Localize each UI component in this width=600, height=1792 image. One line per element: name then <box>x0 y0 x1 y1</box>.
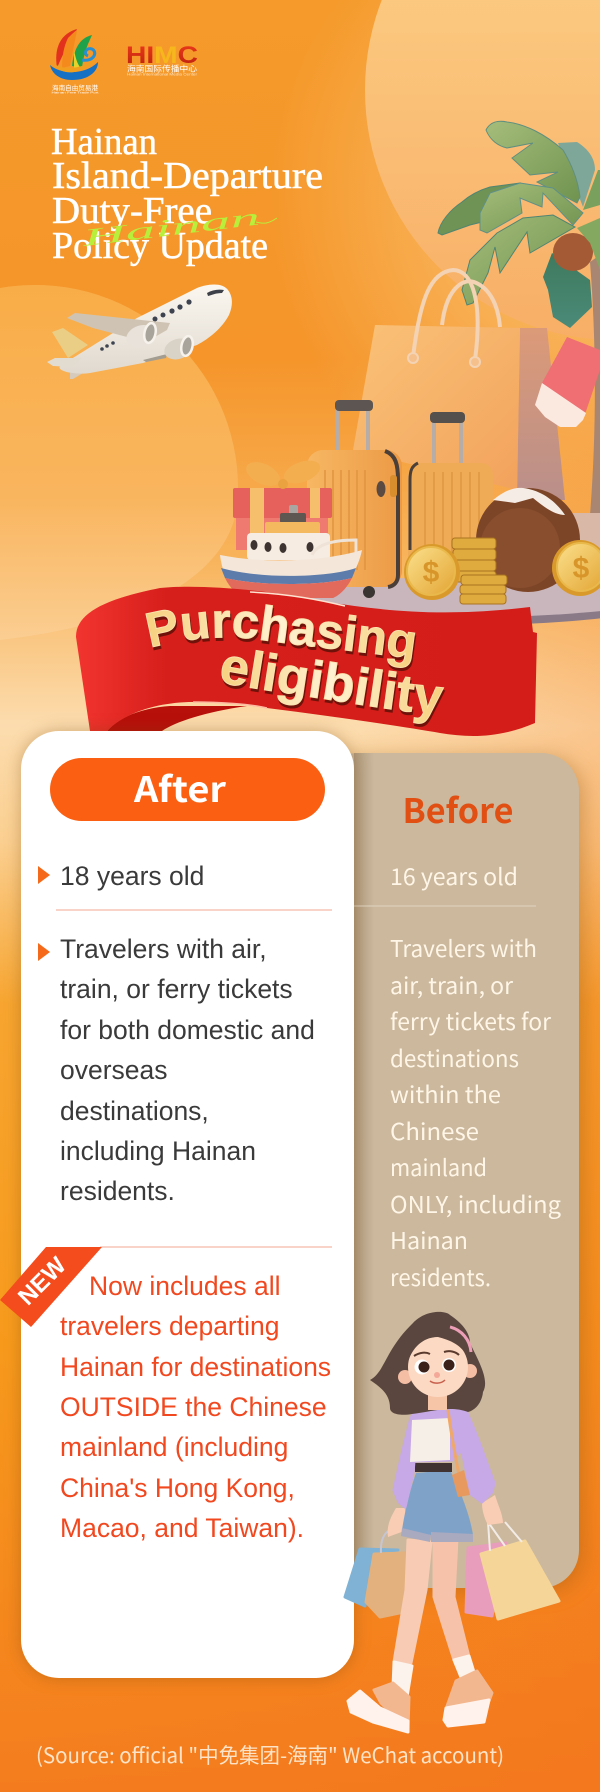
icon: coins <box>404 538 600 604</box>
after age: 18 years old <box>60 861 204 891</box>
banner text: Purchasing eligibility: eligibility <box>221 650 446 727</box>
platform <box>205 513 600 626</box>
banner text: Purchasing eligibility <box>145 604 446 727</box>
shoes <box>374 1683 409 1729</box>
title: Policy Update <box>52 225 268 267</box>
hair <box>370 1312 485 1415</box>
new policy text: travelers departing <box>60 1311 279 1341</box>
after travelers text: overseas <box>60 1055 168 1085</box>
before travelers text: destinations <box>390 1040 519 1074</box>
girl with shopping bags <box>345 1312 559 1732</box>
icon: coconut <box>476 488 580 592</box>
right bags <box>466 1522 559 1619</box>
shorts <box>402 1470 473 1535</box>
panel: before <box>320 753 579 1588</box>
script overlay: Hainan <box>79 204 277 252</box>
script overlay: Hainan: Hainan <box>79 204 261 252</box>
icon: ship <box>220 505 362 598</box>
eyes <box>414 1351 459 1383</box>
new policy text: Macao, and Taiwan). <box>60 1513 304 1543</box>
before travelers text: ferry tickets for <box>390 1003 551 1037</box>
icon: large suitcase <box>307 400 402 598</box>
left bags <box>345 1530 406 1617</box>
after travelers text: train, or ferry tickets <box>60 974 293 1004</box>
title: Duty-Free <box>52 190 212 232</box>
title <box>51 121 323 267</box>
new policy text: OUTSIDE the Chinese <box>60 1392 327 1422</box>
new policy text <box>60 1271 331 1543</box>
logo: Hainan Free Trade Port: Hainan Free Trade Port <box>52 90 99 94</box>
new ribbon: NEW <box>13 1252 72 1311</box>
before travelers text <box>390 930 561 1293</box>
new policy text: Hainan for destinations <box>60 1352 331 1382</box>
hoodie <box>394 1401 494 1507</box>
before travelers text: Chinese <box>390 1113 479 1147</box>
socks <box>393 1662 412 1697</box>
before travelers text: Hainan <box>390 1222 468 1256</box>
panel: after <box>21 731 354 1678</box>
before travelers text: within the <box>390 1076 501 1110</box>
after travelers text: destinations, <box>60 1096 209 1126</box>
after travelers text <box>38 934 315 1206</box>
new policy text: Now includes all <box>89 1271 280 1301</box>
after travelers text: Travelers with air, <box>60 934 267 964</box>
arms <box>388 1508 407 1537</box>
logo: HIMC: Hainan International Media Center <box>127 72 198 76</box>
icon: tag <box>535 337 600 427</box>
face <box>398 1326 477 1397</box>
before heading: Before <box>402 784 514 833</box>
headband <box>450 1327 471 1352</box>
before travelers text: ONLY, including <box>390 1186 561 1220</box>
after travelers text: residents. <box>60 1176 175 1206</box>
legs <box>394 1540 431 1663</box>
new policy text: mainland (including <box>60 1432 288 1462</box>
red banner <box>76 587 537 736</box>
neck <box>428 1390 447 1410</box>
logo: HIMC: HIMC <box>126 42 198 69</box>
title: Island-Departure <box>52 155 323 197</box>
icon: small suitcase <box>408 412 493 573</box>
after heading pill <box>50 758 325 821</box>
logo: Hainan Free Trade Port: 海南自由贸易港 <box>52 82 99 92</box>
icon: coins: $ <box>423 556 440 589</box>
before travelers text: air, train, or <box>390 967 513 1001</box>
source: (Source: official "中免集团-海南" WeChat account) <box>36 1740 504 1770</box>
before travelers text: Travelers with <box>390 930 537 964</box>
before age: 16 years old <box>390 858 518 892</box>
icon: coins: $ <box>573 552 590 585</box>
after travelers text: for both domestic and <box>60 1015 315 1045</box>
after heading pill: After <box>133 762 227 813</box>
after travelers text: including Hainan <box>60 1136 256 1166</box>
icon: airplane <box>47 284 232 379</box>
before travelers text: mainland <box>390 1149 487 1183</box>
before travelers text: residents. <box>390 1259 491 1293</box>
icon: shopping bag <box>353 270 565 500</box>
new ribbon <box>0 1247 102 1327</box>
title: Hainan <box>51 121 157 163</box>
icon: gift box <box>233 456 332 550</box>
icon: palm tree <box>438 121 600 515</box>
new policy text: China's Hong Kong, <box>60 1473 295 1503</box>
logo: HIMC: 海南国际传播中心 <box>127 64 197 74</box>
banner text: Purchasing eligibility: Purchasing <box>145 604 416 671</box>
logo: Hainan Free Trade Port <box>50 29 99 94</box>
